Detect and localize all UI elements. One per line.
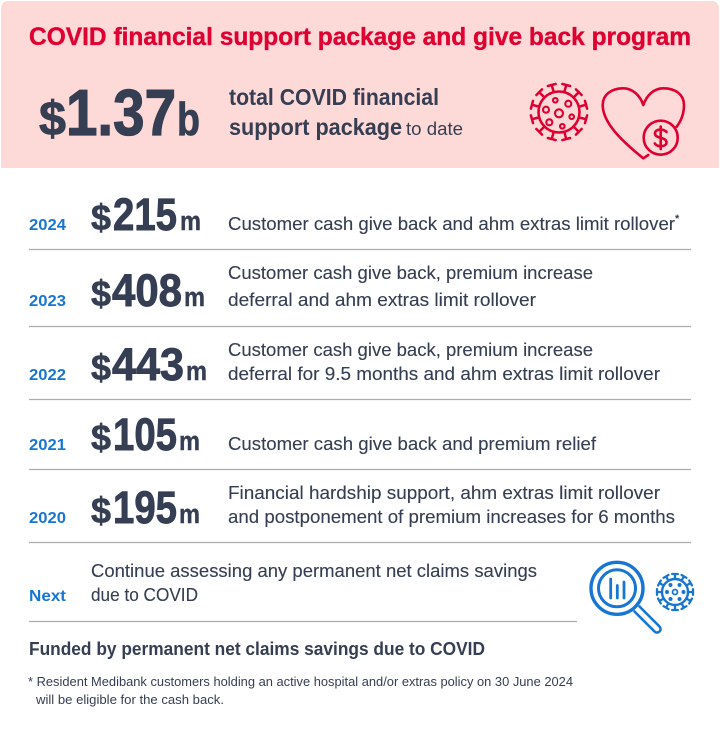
total description: to date <box>406 119 463 139</box>
row: 2020: 195 <box>113 482 177 533</box>
row: 2022: m <box>186 356 207 386</box>
row: 2023: 408 <box>112 265 182 316</box>
row: 2021: $ <box>91 417 111 458</box>
icon: magnifying glass with bar chart <box>591 562 661 633</box>
row: 2021: Customer cash give back and premium relief <box>228 434 597 454</box>
row: 2021: m <box>179 426 200 456</box>
row: 2020: Financial hardship support, ahm extras limit rollover <box>228 483 660 503</box>
row: 2024 <box>29 189 680 240</box>
row: 2022: 443 <box>112 339 184 390</box>
row: 2021 <box>29 409 597 460</box>
total amount: 1.37 <box>66 76 176 149</box>
row: 2022: $ <box>91 347 111 388</box>
row: next: Next <box>29 588 67 605</box>
row: 2023: 2023 <box>29 293 66 310</box>
row: 2024: 215 <box>113 189 177 240</box>
row: 2023 <box>29 263 593 316</box>
title: COVID financial support package and give back program <box>29 23 691 51</box>
row: 2023: deferral and ahm extras limit rollover <box>228 290 536 310</box>
row: 2023: Customer cash give back, premium increase <box>228 263 593 283</box>
total description: total COVID financial <box>229 84 439 110</box>
total description <box>229 84 463 140</box>
icon: heart with dollar coin <box>603 88 684 158</box>
row: 2020: $ <box>91 490 111 531</box>
row: 2023: $ <box>91 273 111 314</box>
row: next: due to COVID <box>91 585 198 605</box>
footnote <box>28 674 573 707</box>
icon: virus blue <box>657 574 693 610</box>
row: 2022 <box>29 339 660 390</box>
row: 2023: m <box>184 282 205 312</box>
footnote: will be eligible for the cash back. <box>35 692 224 707</box>
row: 2024: 2024 <box>29 217 66 234</box>
row: 2020 <box>29 482 675 533</box>
row: 2024: Customer cash give back and ahm extras limit rollover <box>228 214 675 234</box>
row: next <box>29 561 537 605</box>
footnote: * Resident Medibank customers holding an active hospital and/or extras policy on 30 June 2024 <box>28 674 573 689</box>
row: 2022: deferral for 9.5 months and ahm extras limit rollover <box>228 364 660 384</box>
row: 2020: 2020 <box>29 510 66 527</box>
row: 2021: 105 <box>113 409 177 460</box>
row: 2022: Customer cash give back, premium increase <box>228 340 593 360</box>
header panel background <box>1 1 719 168</box>
row: 2024: * <box>675 213 680 225</box>
row: next: Continue assessing any permanent net claims savings <box>91 561 537 581</box>
funded by statement: Funded by permanent net claims savings due to COVID <box>29 639 485 659</box>
row: 2024: m <box>180 206 201 236</box>
row: 2022: 2022 <box>29 367 66 384</box>
icon: virus red <box>531 84 587 140</box>
row: 2021: 2021 <box>29 437 66 454</box>
row: 2020: and postponement of premium increases for 6 months <box>228 507 675 527</box>
total description: support package <box>229 114 402 140</box>
total amount: $ <box>39 93 66 146</box>
row: 2020: m <box>179 499 200 529</box>
total amount: b <box>177 93 200 145</box>
row: 2024: $ <box>91 197 111 238</box>
